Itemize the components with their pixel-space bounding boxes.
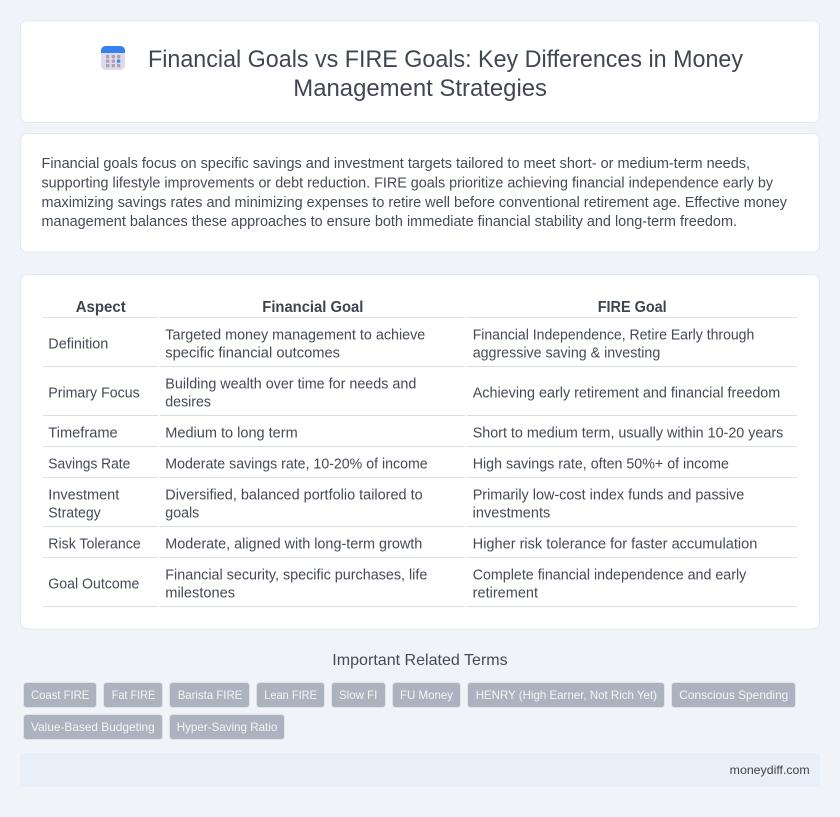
panel: related term tags: Value-Based Budgeting — [31, 720, 155, 734]
panel: introduction text: maximizing savings rates and minimizing expenses to retire well before conventional retirement age. Effective money — [42, 195, 788, 211]
row: savings rate — [48, 456, 729, 472]
panel: introduction text — [20, 134, 820, 252]
row: definition: specific financial outcomes — [165, 345, 340, 361]
panel: related term tags: Fat FIRE — [112, 688, 155, 702]
row: primary focus: desires — [165, 394, 211, 410]
row: primary focus: Primary Focus — [48, 385, 140, 401]
row: primary focus: Achieving early retirement and financial freedom — [473, 385, 780, 401]
footer: moneydiff.com — [730, 763, 810, 777]
row: goal outcome — [48, 567, 747, 601]
table header row — [76, 299, 667, 316]
row: primary focus: Building wealth over time for needs and — [165, 376, 416, 392]
panel: introduction text: supporting lifestyle improvements or debt reduction. FIRE goals prioritize achieving financial independence early by — [42, 176, 774, 192]
panel: comparison table — [20, 274, 820, 629]
panel: related term tags: Conscious Spending — [679, 688, 788, 702]
row: savings rate: Savings Rate — [48, 456, 130, 472]
icon: calendar — [101, 46, 125, 70]
row: savings rate: High savings rate, often 50%+ of income — [473, 456, 729, 472]
panel: related term tags — [24, 682, 796, 740]
panel: introduction text: Financial goals focus on specific savings and investment targets tailored to meet short- or medium-term needs, — [42, 156, 750, 172]
row: primary focus — [48, 376, 780, 410]
title: Management Strategies — [293, 75, 547, 102]
row: goal outcome: milestones — [165, 585, 235, 601]
panel: related term tags: FU Money — [400, 688, 453, 702]
table header row: FIRE Goal — [598, 299, 667, 316]
panel: related term tags: Coast FIRE — [31, 688, 89, 702]
row: investment strategy: investments — [473, 505, 550, 521]
row: investment strategy: Primarily low-cost index funds and passive — [473, 487, 744, 503]
row: timeframe: Medium to long term — [165, 425, 298, 441]
panel: related term tags: HENRY (High Earner, Not Rich Yet) — [476, 688, 657, 702]
row: goal outcome: retirement — [473, 585, 538, 601]
title: Financial Goals vs FIRE Goals: Key Differences in Money — [148, 46, 743, 73]
heading: important related terms: Important Related Terms — [332, 652, 508, 669]
row: investment strategy: goals — [165, 505, 199, 521]
row: definition — [48, 327, 754, 361]
panel: header — [20, 20, 820, 122]
row: risk tolerance: Risk Tolerance — [48, 536, 141, 552]
table header row: Financial Goal — [262, 299, 363, 316]
row: risk tolerance — [48, 536, 757, 552]
panel: related term tags: Hyper-Saving Ratio — [177, 720, 278, 734]
title — [148, 46, 743, 102]
row: timeframe: Short to medium term, usually within 10-20 years — [473, 425, 783, 441]
row: savings rate: Moderate savings rate, 10-20% of income — [165, 456, 428, 472]
row: investment strategy: Strategy — [48, 505, 101, 521]
panel: introduction text: management balances these approaches to ensure both immediate financial stability and long-term freedom. — [42, 214, 737, 230]
panel: related term tags: Lean FIRE — [264, 688, 317, 702]
row: investment strategy: Diversified, balanced portfolio tailored to — [165, 487, 423, 503]
row: goal outcome: Financial security, specific purchases, life — [165, 567, 427, 583]
row: investment strategy — [48, 487, 744, 521]
row: definition: Targeted money management to achieve — [165, 327, 425, 343]
row: definition: Definition — [48, 336, 108, 352]
row: investment strategy: Investment — [48, 487, 119, 503]
row: timeframe — [48, 425, 783, 441]
row: definition: aggressive saving & investing — [473, 345, 660, 361]
row: goal outcome: Goal Outcome — [48, 576, 139, 592]
row: goal outcome: Complete financial independence and early — [473, 567, 747, 583]
panel: related term tags: Slow FI — [339, 688, 377, 702]
footer — [20, 753, 820, 787]
row: risk tolerance: Moderate, aligned with long-term growth — [165, 536, 422, 552]
panel: related term tags: Barista FIRE — [178, 688, 242, 702]
row: timeframe: Timeframe — [48, 425, 118, 441]
row: definition: Financial Independence, Retire Early through — [473, 327, 754, 343]
table header row: Aspect — [76, 299, 126, 316]
row: risk tolerance: Higher risk tolerance for faster accumulation — [473, 536, 757, 552]
